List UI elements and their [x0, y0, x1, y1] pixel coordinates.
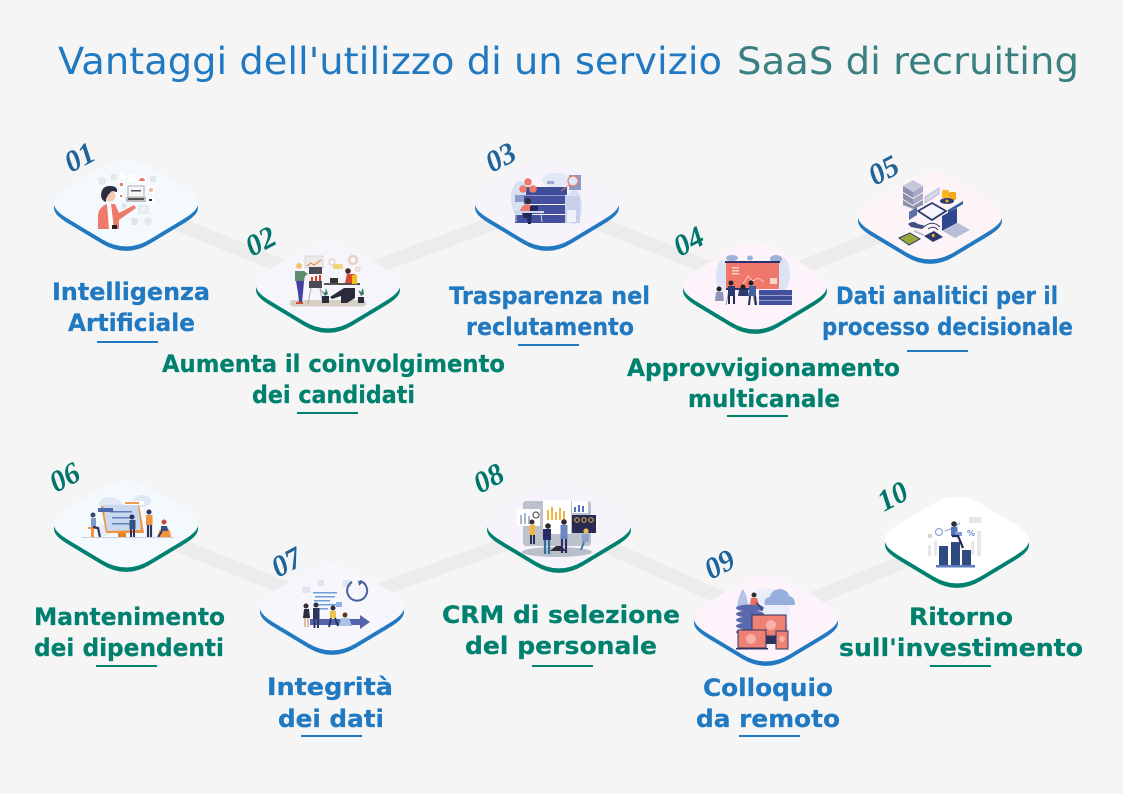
step 10 — [839, 475, 1083, 667]
diamond 02 — [256, 242, 400, 333]
icon: data integrity — [302, 580, 370, 629]
label 08 — [442, 601, 680, 667]
label 07: Integrità — [267, 673, 393, 701]
label 03: Trasparenza nel — [449, 282, 650, 310]
diamond 03 — [475, 160, 619, 251]
diamond 04 — [683, 243, 827, 334]
number 01: 01 — [59, 136, 101, 179]
step 08 — [442, 457, 680, 667]
connector path: bottom row — [126, 524, 957, 618]
step 07 — [260, 540, 404, 737]
label 02 — [162, 350, 505, 414]
step 02 — [162, 220, 505, 414]
label 04 — [627, 354, 900, 417]
diamond 05 — [858, 173, 1002, 264]
label 07: dei dati — [278, 705, 384, 733]
label 05: processo decisionale — [822, 313, 1073, 341]
label 09 — [696, 674, 840, 737]
number 07: 07 — [266, 540, 309, 584]
title: SaaS di recruiting — [737, 40, 1079, 83]
label 04: Approvvigionamento — [627, 354, 900, 382]
title — [58, 40, 1079, 83]
label 10: Ritorno — [909, 603, 1013, 631]
step 04 — [627, 220, 900, 417]
label 08: del personale — [465, 632, 657, 660]
label 09: da remoto — [696, 705, 840, 733]
step 06 — [34, 456, 225, 667]
icon: team at flipchart — [290, 256, 366, 306]
diamond 08 — [487, 482, 631, 573]
step 01 — [52, 136, 210, 343]
number 04: 04 — [668, 220, 710, 263]
label 06: dei dipendenti — [34, 634, 224, 662]
number 06: 06 — [44, 456, 86, 499]
diamond 06 — [54, 481, 198, 572]
label 10: sull'investimento — [839, 634, 1083, 662]
label 05: Dati analitici per il — [836, 282, 1058, 310]
label 08: CRM di selezione — [442, 601, 680, 629]
label 06: Mantenimento — [34, 603, 225, 631]
number 10: 10 — [872, 475, 914, 518]
label 03: reclutamento — [466, 313, 634, 341]
number 09: 09 — [699, 543, 741, 586]
step 03 — [449, 136, 650, 346]
number 02: 02 — [240, 220, 282, 263]
icon: employees and monitor — [82, 495, 174, 538]
title: Vantaggi dell'utilizzo di un servizio — [58, 40, 722, 83]
step 05 — [822, 149, 1073, 352]
label 02: dei candidati — [252, 381, 415, 409]
label 05 — [822, 282, 1073, 352]
diamond 09 — [694, 575, 838, 666]
label 09: Colloquio — [703, 674, 833, 702]
label 07 — [267, 673, 393, 737]
step 09 — [694, 543, 840, 737]
label 04: multicanale — [688, 385, 840, 413]
diamond 10 — [885, 497, 1029, 588]
number 03: 03 — [480, 136, 522, 179]
icon: woman presenting AI — [98, 173, 156, 229]
label 06 — [34, 603, 225, 667]
icon: return on investment — [928, 517, 981, 568]
icon: remote interview devices — [736, 588, 795, 650]
number 08: 08 — [468, 457, 510, 500]
number 05: 05 — [863, 149, 905, 192]
label 01: Intelligenza — [52, 278, 210, 306]
label 01 — [52, 278, 210, 343]
label 10 — [839, 603, 1083, 667]
icon: recruiting stack — [511, 173, 582, 224]
diamond 01 — [54, 160, 198, 251]
diamond 07 — [260, 564, 404, 655]
label 02: Aumenta il coinvolgimento — [162, 350, 505, 378]
icon: team at screen — [715, 255, 792, 305]
label 03 — [449, 282, 650, 346]
icon: data analytics devices — [899, 180, 970, 245]
icon: return on investment: % — [967, 529, 975, 538]
connector path: top row — [126, 203, 930, 286]
label 01: Artificiale — [68, 309, 195, 337]
icon: CRM dashboards team — [517, 500, 596, 557]
